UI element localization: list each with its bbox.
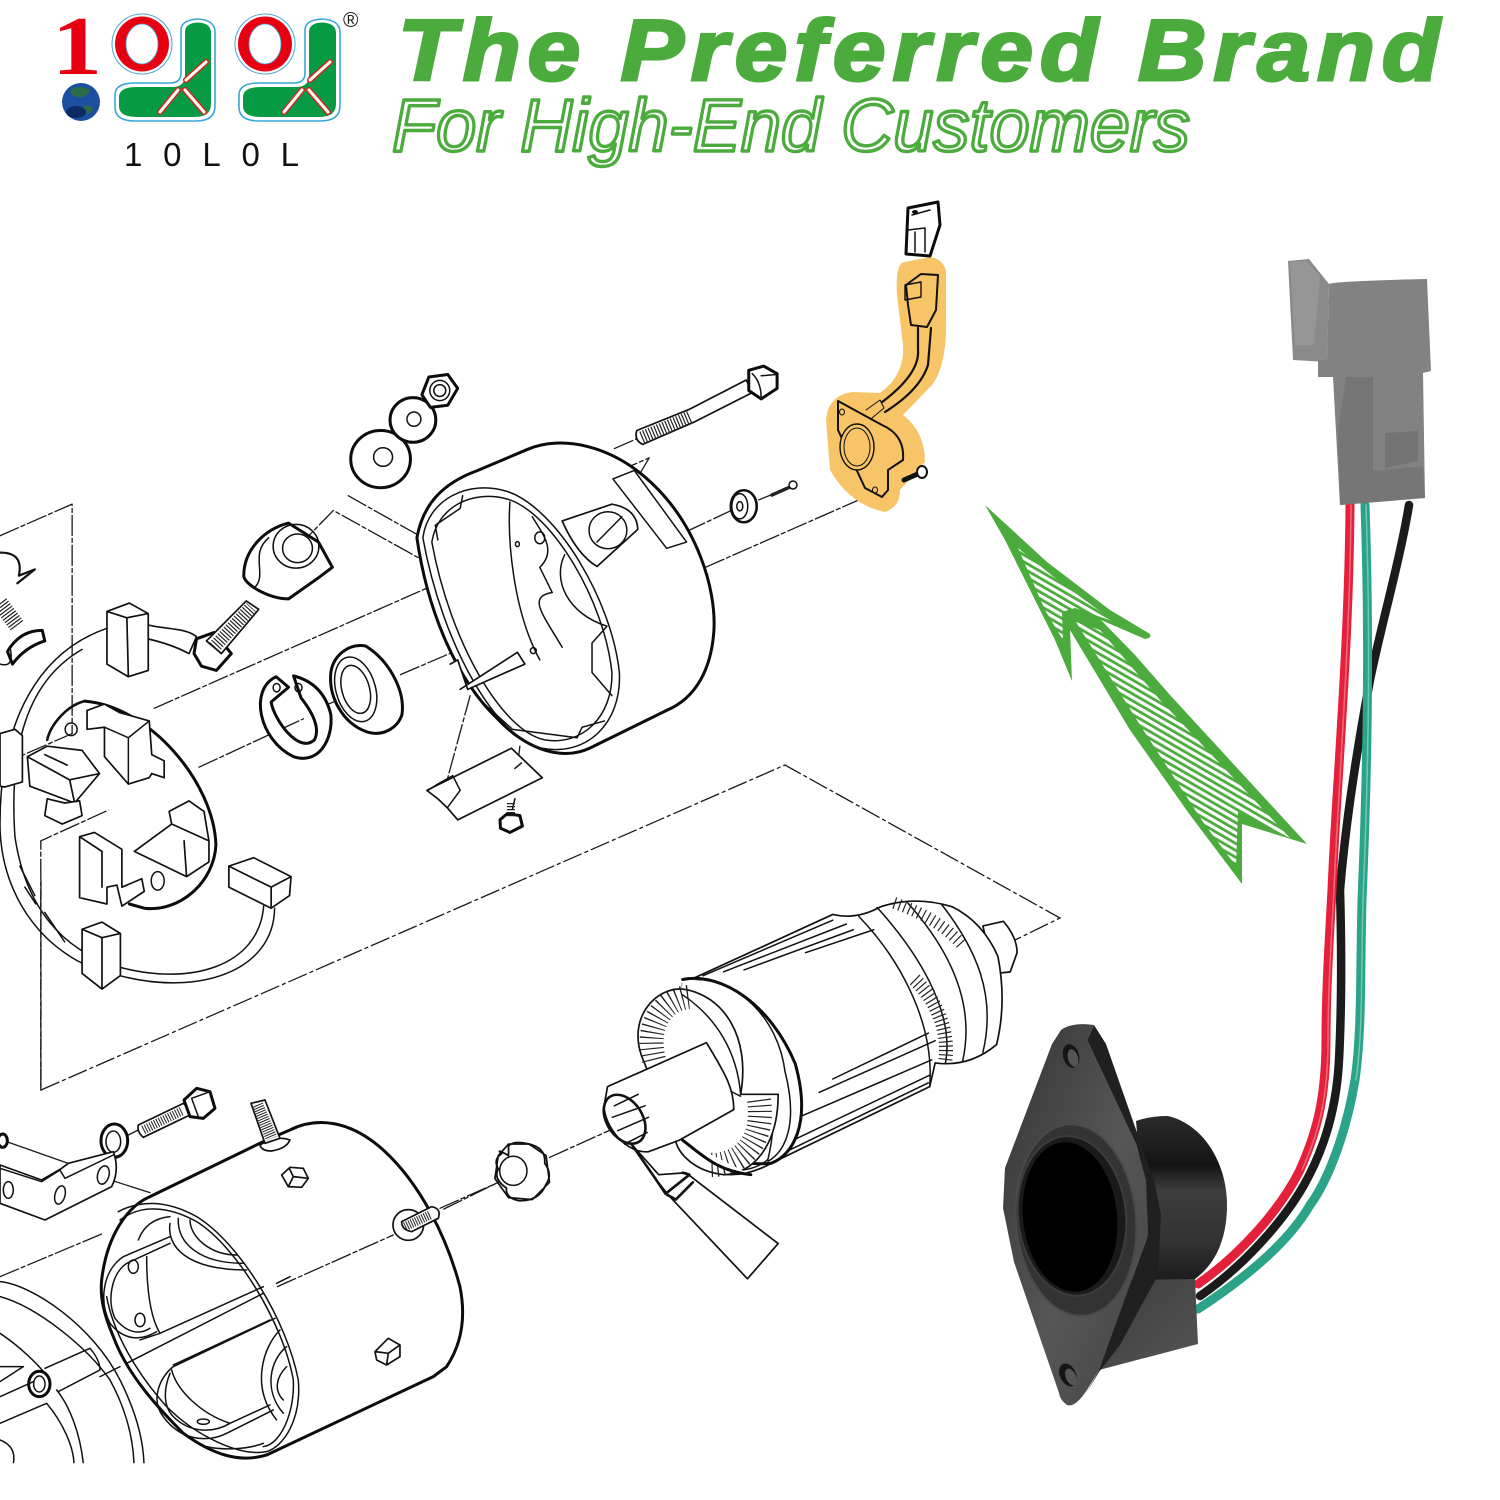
dash lines: [41, 880, 689, 1209]
terminal bracket: [0, 1134, 116, 1220]
brush top: [107, 603, 148, 677]
connector tab: [1288, 259, 1329, 362]
logo green block right: [239, 19, 340, 121]
title: The Preferred Brand: The Preferred Brand: [398, 3, 1442, 99]
line-art connector: [878, 274, 938, 412]
arrow hatching: [1018, 548, 1290, 866]
logo: 10L0L: [52, 0, 359, 173]
front frame arcs: [0, 1282, 144, 1463]
brush plate: [0, 628, 275, 983]
armature shaft: [597, 1043, 734, 1152]
star washer: [495, 1143, 549, 1201]
sensor cylinder: [1136, 1116, 1227, 1282]
sensor ring: [1008, 1119, 1144, 1321]
long dashed assembly frame: [41, 765, 1060, 1090]
yellow highlight: [826, 258, 946, 512]
exploded motor diagram: armature section: [41, 880, 1017, 1279]
sensor bore: [1015, 1137, 1125, 1297]
upper connector line art: [906, 202, 940, 256]
logo red ring right: [235, 14, 295, 74]
subtitle: For High-End Customers: For High-End Customers: [392, 84, 1190, 167]
terminal screw and lead: [137, 601, 259, 670]
connector body: [1318, 279, 1431, 505]
product: sensor: [1003, 1024, 1227, 1405]
logo wordmark: 10L0L: [124, 136, 299, 173]
snap ring: [260, 676, 331, 758]
stator dash lines: [0, 1130, 500, 1287]
cover bracket: [427, 748, 542, 832]
black wire: [1200, 505, 1409, 1296]
spring clip left: [0, 553, 35, 583]
assembly dash lines: [0, 438, 861, 1089]
registered mark: ®: [343, 9, 359, 32]
tiny screw: [904, 466, 927, 480]
bushing: [244, 523, 332, 599]
mounting bolt and washer: [101, 1088, 215, 1157]
brush left edge: [0, 729, 22, 787]
armature rotor: [638, 901, 1017, 1175]
small screw by washer: [772, 481, 797, 495]
stator housing: [101, 1123, 463, 1458]
exploded motor diagram: end cap section: [0, 366, 861, 1089]
product: grey connector: [1288, 259, 1431, 505]
sensor flange side: [1087, 1025, 1161, 1392]
sensor mounting holes: [1056, 1042, 1082, 1389]
green arrow: [985, 505, 1307, 884]
brush bottom: [82, 922, 120, 989]
sensor inner ring: [1010, 1131, 1134, 1301]
line-art flange: [838, 400, 903, 497]
long bolt: [636, 366, 777, 444]
red wire: [1198, 505, 1351, 1284]
stator bolts: [251, 1100, 439, 1365]
lubricant tube: [631, 1144, 778, 1279]
logo globe: [62, 83, 100, 121]
motor stator section: [0, 1088, 500, 1463]
small washer: [731, 490, 757, 522]
product: wires: [1198, 505, 1409, 1309]
logo numeral one: 1: [52, 0, 102, 93]
arrow solid shape: [985, 505, 1307, 884]
sensor flange face: [1003, 1024, 1148, 1405]
highlighted sensor part: [772, 202, 946, 512]
field coils: [100, 1217, 290, 1449]
connector highlight: [1290, 261, 1320, 345]
green wire: [1198, 505, 1369, 1309]
nut and washers: [351, 375, 458, 488]
brush right: [229, 858, 291, 908]
connector shading: [1338, 377, 1425, 505]
logo green block left: [115, 19, 215, 121]
terminal bolt left: [0, 603, 45, 665]
bearing: [328, 646, 402, 733]
end cap housing: [417, 443, 714, 753]
connector window: [1385, 431, 1418, 468]
sensor lower block: [1099, 1279, 1198, 1370]
logo red ring left: [112, 14, 172, 74]
